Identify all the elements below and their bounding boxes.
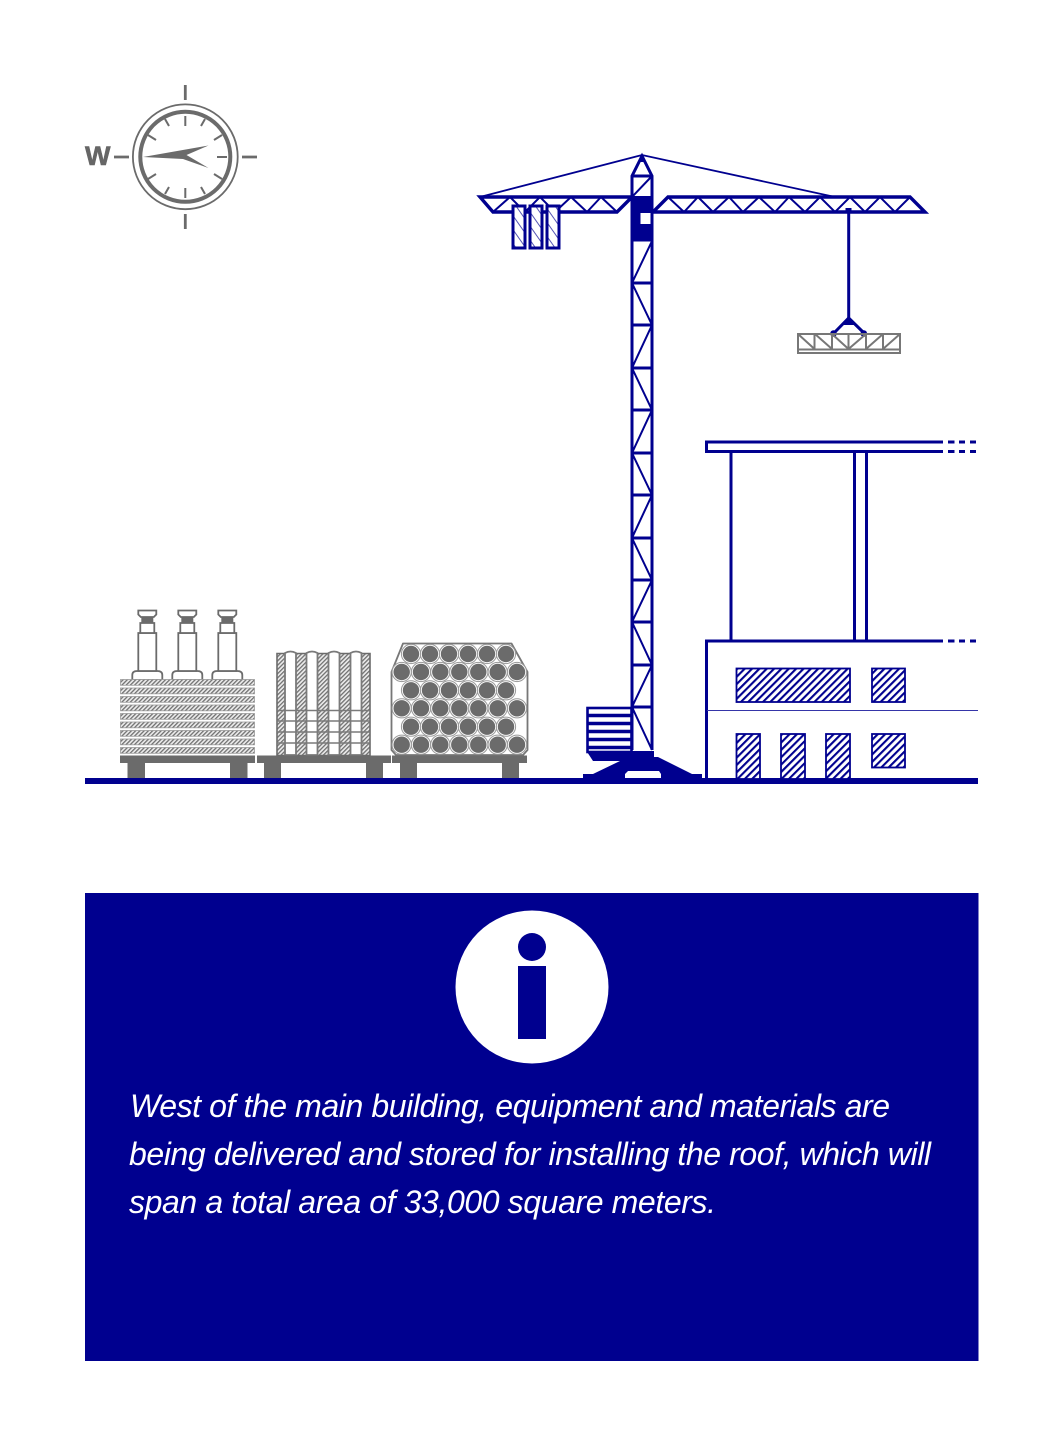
ground line — [85, 778, 978, 784]
compass ticks — [114, 85, 257, 229]
pallet — [392, 756, 527, 778]
pallet — [120, 756, 255, 778]
W label: W — [85, 141, 111, 171]
info text: being delivered and stored for installing the roof, which will — [129, 1136, 932, 1172]
pallet with pipes — [392, 644, 528, 778]
left counter jib — [480, 197, 632, 212]
info text: span a total area of 33,000 square meters. — [129, 1184, 716, 1220]
tower mast — [632, 156, 652, 750]
hatched column stack — [277, 654, 370, 756]
pipes — [392, 644, 527, 754]
white columns — [285, 652, 362, 755]
tower crane — [480, 155, 925, 778]
compass rings — [133, 104, 238, 209]
icon: info — [456, 910, 608, 1064]
hatched windows — [736, 668, 905, 779]
operator cab block — [630, 196, 654, 242]
mast base cage — [587, 708, 632, 752]
compass dial marks — [148, 116, 227, 198]
column bands — [277, 710, 370, 743]
jacks — [132, 610, 242, 680]
stacked slabs — [120, 680, 254, 753]
right jib — [653, 197, 925, 212]
info text — [129, 1088, 932, 1220]
panel background — [85, 893, 978, 1361]
jib stays — [480, 155, 835, 197]
hook spreader — [830, 318, 867, 337]
compass — [85, 85, 257, 229]
columns — [731, 451, 866, 641]
main building — [706, 442, 978, 779]
hoisted roof truss — [798, 334, 900, 353]
pipe bundle strap — [392, 644, 528, 755]
pallet with columns — [257, 652, 391, 778]
pallet with jacks and slabs — [120, 610, 255, 778]
hook cable — [847, 209, 850, 320]
compass needle — [143, 146, 208, 168]
roof beam — [706, 442, 976, 452]
counterweights — [513, 206, 559, 248]
panel: information — [85, 893, 978, 1361]
floor divider — [707, 710, 978, 712]
pallet — [257, 756, 391, 778]
apex — [639, 155, 645, 162]
info text: West of the main building, equipment and materials are — [130, 1088, 890, 1124]
crane base — [583, 751, 702, 778]
lower floor outline — [706, 641, 976, 779]
